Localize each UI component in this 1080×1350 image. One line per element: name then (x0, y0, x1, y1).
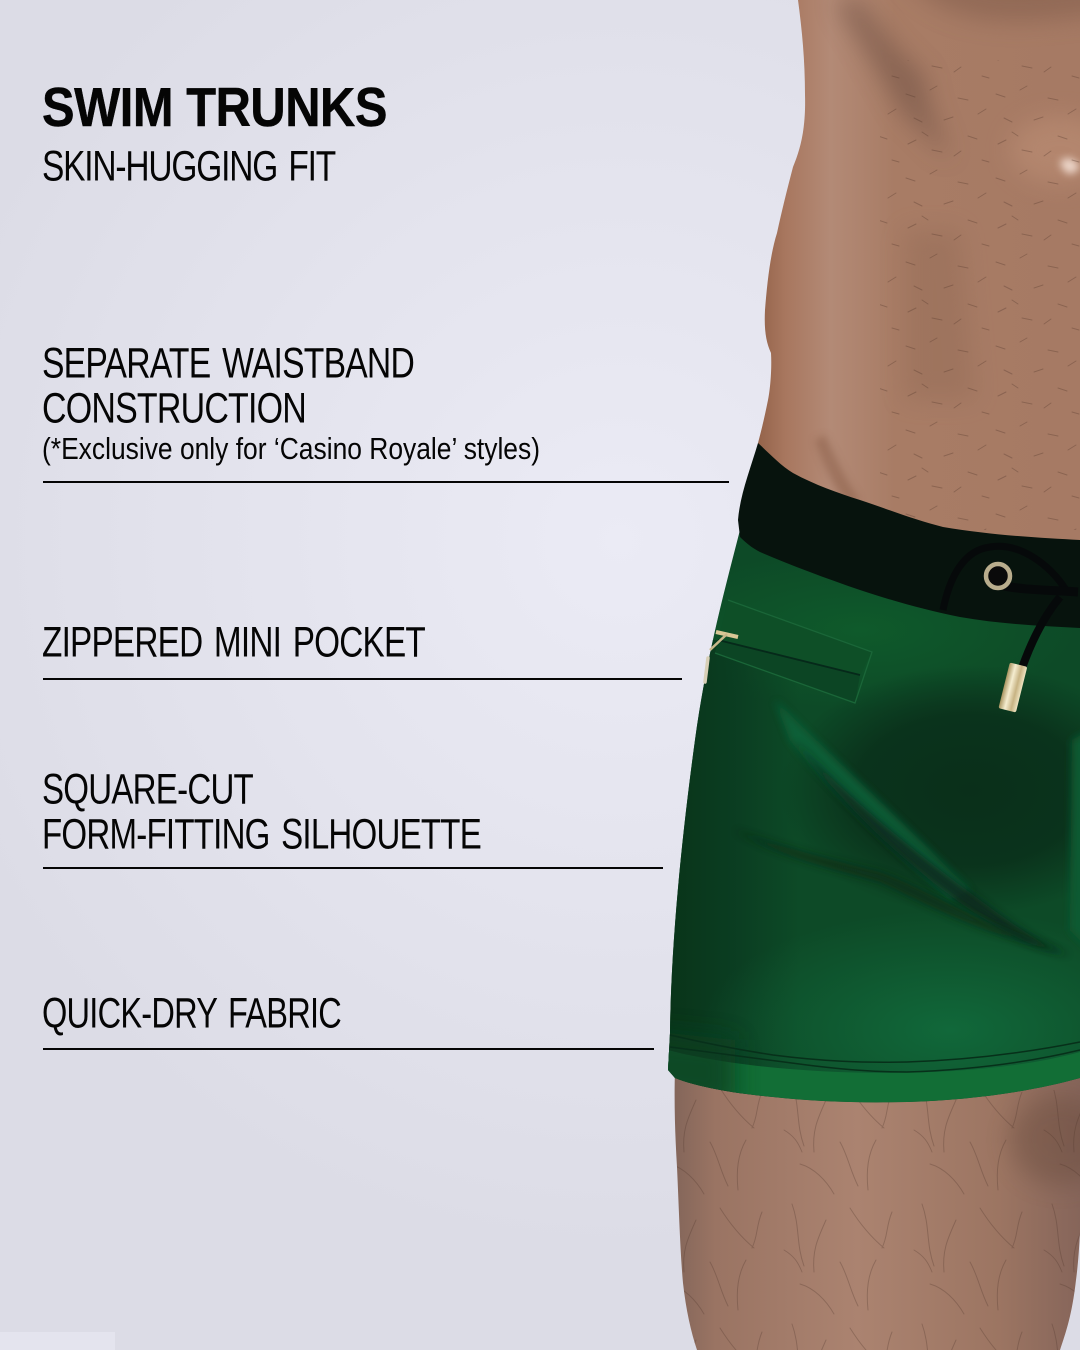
swim trunks body (668, 532, 1080, 1102)
trunks hem stitching (670, 1035, 1080, 1072)
zippered pocket (705, 600, 872, 703)
feature: separate waistband (42, 340, 729, 483)
subheading: SKIN-HUGGING FIT (42, 142, 336, 190)
model torso (750, 0, 1080, 570)
waistband (738, 443, 1080, 628)
model thigh (670, 1060, 1080, 1350)
feature: separate waistband: CONSTRUCTION (42, 384, 306, 432)
feature: square-cut silhouette: SQUARE-CUT (42, 766, 254, 814)
drawstring and grommet (943, 546, 1078, 712)
feature: zippered pocket: ZIPPERED MINI POCKET (42, 618, 426, 666)
feature: separate waistband: (*Exclusive only for ‘Casino Royale’ styles) (42, 431, 540, 466)
heading: swim trunks: SWIM TRUNKS (42, 76, 387, 138)
feature: quick-dry fabric: QUICK-DRY FABRIC (42, 990, 341, 1038)
feature: separate waistband: SEPARATE WAISTBAND (42, 340, 414, 388)
feature: square-cut silhouette (42, 766, 663, 869)
feature: square-cut silhouette: FORM-FITTING SILHOUETTE (42, 810, 481, 858)
